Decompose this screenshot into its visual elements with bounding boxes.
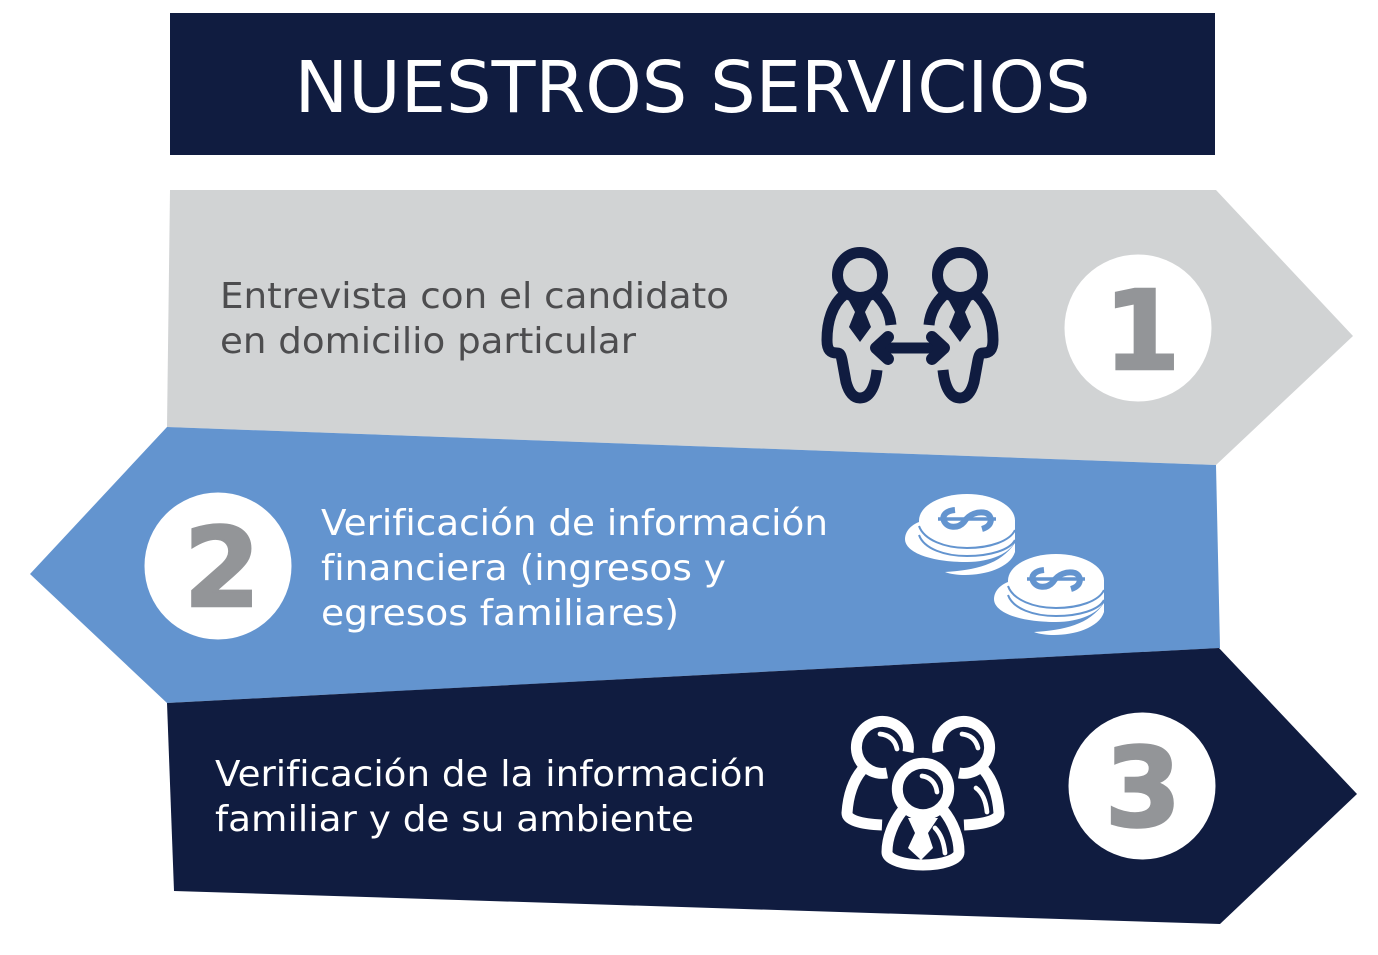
panel: service 2 [30, 427, 1220, 703]
service 2 text [321, 503, 828, 634]
number badge 1 [1064, 254, 1212, 402]
service 1 text [220, 276, 729, 362]
title banner: NUESTROS SERVICIOS [294, 46, 1090, 129]
panel: service 3 [167, 648, 1357, 924]
coin stack B [994, 554, 1104, 635]
panel: service 1 [167, 190, 1353, 465]
number badge 2 [144, 492, 292, 640]
service 1 text: en domicilio particular [220, 321, 636, 362]
number badge 3: 3 [1105, 724, 1181, 852]
service 3 text: familiar y de su ambiente [215, 799, 694, 840]
service 3 text: Verificación de la información [215, 754, 766, 795]
service 1 text: Entrevista con el candidato [220, 276, 729, 317]
service 2 text: egresos familiares) [321, 593, 679, 634]
title banner [170, 13, 1215, 155]
number badge 3 [1068, 712, 1216, 860]
service 2 text: Verificación de información [321, 503, 828, 544]
number badge 1: 1 [1104, 267, 1180, 395]
coin stack A [905, 494, 1015, 575]
number badge 2: 2 [184, 504, 260, 632]
service 2 text: financiera (ingresos y [321, 548, 726, 589]
icon: group of people [847, 721, 999, 865]
service 3 text [215, 754, 766, 840]
icon: coins [905, 494, 1104, 635]
icon: two people exchanging [827, 252, 993, 398]
